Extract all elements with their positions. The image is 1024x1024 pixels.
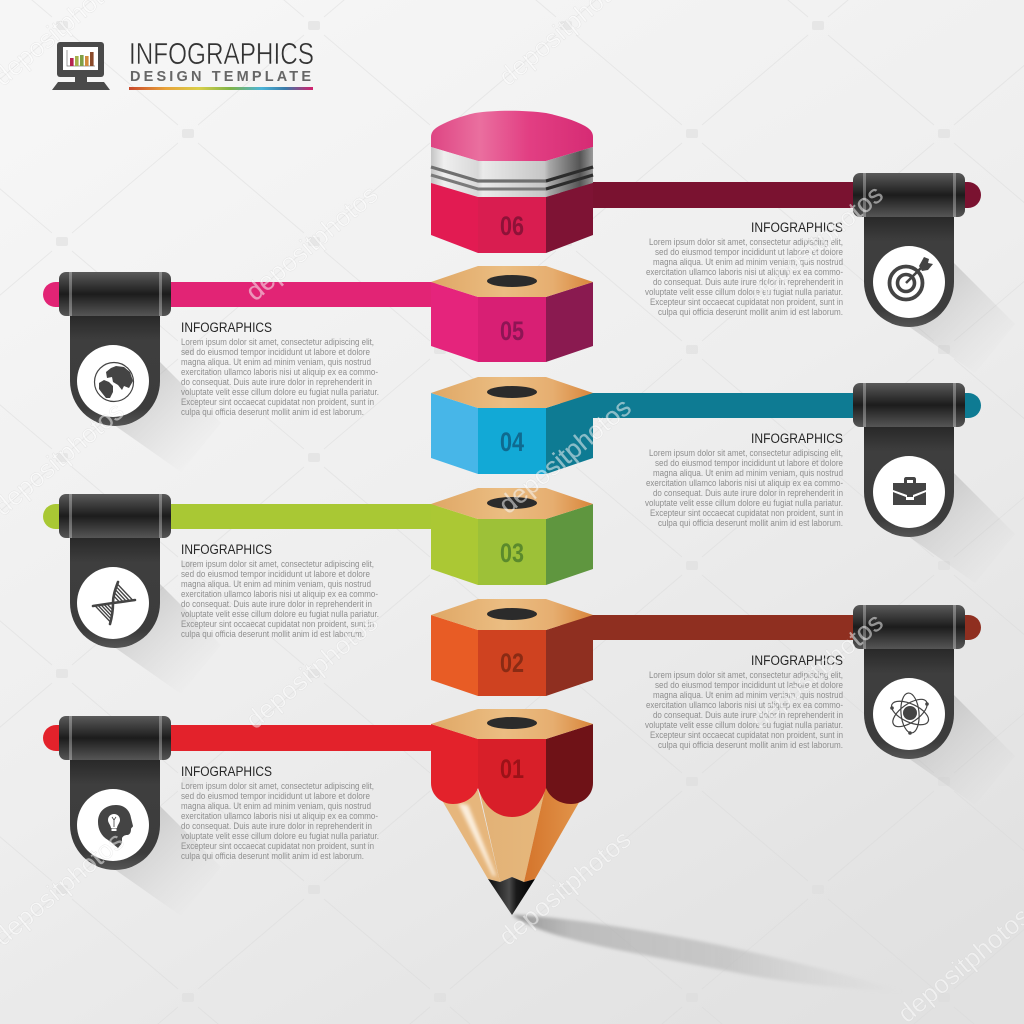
text block 06: magna aliqua. Ut enim ad minim veniam, quis nostrud	[653, 257, 843, 267]
text block 04	[645, 431, 843, 528]
number 02: 02	[500, 648, 524, 678]
text block 01: magna aliqua. Ut enim ad minim veniam, quis nostrud	[181, 801, 371, 811]
text block 02: Excepteur sint occaecat cupidatat non proident, sunt in	[650, 730, 843, 740]
text block 03: sed do eiusmod tempor incididunt ut labore et dolore	[181, 569, 370, 579]
text block 05: Excepteur sint occaecat cupidatat non proident, sunt in	[181, 397, 374, 407]
text block 03: voluptate velit esse cillum dolore eu fugiat nulla pariatur.	[181, 609, 379, 619]
text block 02: sed do eiusmod tempor incididunt ut labore et dolore	[655, 680, 843, 690]
text block 04: Excepteur sint occaecat cupidatat non proident, sunt in	[650, 508, 843, 518]
text block 06	[645, 220, 843, 317]
header title: DESIGN TEMPLATE	[130, 69, 311, 85]
text block 05: do consequat. Duis aute irure dolor in reprehenderit in	[181, 377, 372, 387]
text block 04: INFOGRAPHICS	[751, 431, 843, 446]
text block 02: culpa qui officia deserunt mollit anim id est laborum.	[658, 740, 843, 750]
text block 02: exercitation ullamco laboris nisi ut aliquip ex ea commo-	[646, 700, 843, 710]
text block 05: Lorem ipsum dolor sit amet, consectetur adipiscing elit,	[181, 337, 374, 347]
ribbon 03 with DNA icon	[59, 494, 221, 694]
text block 06: Lorem ipsum dolor sit amet, consectetur adipiscing elit,	[649, 237, 843, 247]
pencil segment 03	[431, 488, 593, 585]
text block 01: sed do eiusmod tempor incididunt ut labore et dolore	[181, 791, 370, 801]
text block 01: do consequat. Duis aute irure dolor in reprehenderit in	[181, 821, 372, 831]
header logo: monitor icon	[52, 42, 110, 90]
text block 03	[181, 542, 379, 639]
watermarks: depositphotos	[493, 824, 637, 952]
icon: head with light bulb	[98, 805, 133, 848]
pencil eraser segment 06	[431, 111, 593, 253]
watermarks: depositphotos	[745, 179, 889, 307]
text block 05: voluptate velit esse cillum dolore eu fugiat nulla pariatur.	[181, 387, 379, 397]
pencil segment 02	[431, 599, 593, 696]
text block 01	[181, 764, 379, 861]
text block 06: exercitation ullamco laboris nisi ut aliquip ex ea commo-	[646, 267, 843, 277]
text block 02	[645, 653, 843, 750]
text block 04: culpa qui officia deserunt mollit anim id est laborum.	[658, 518, 843, 528]
icon: DNA helix	[93, 582, 135, 624]
text block 06: do consequat. Duis aute irure dolor in reprehenderit in	[653, 277, 843, 287]
text block 03: culpa qui officia deserunt mollit anim id est laborum.	[181, 629, 364, 639]
text block 06: Excepteur sint occaecat cupidatat non proident, sunt in	[650, 297, 843, 307]
graphite lead	[488, 877, 535, 915]
text block 04: exercitation ullamco laboris nisi ut aliquip ex ea commo-	[646, 478, 843, 488]
ribbon 05 with globe icon	[59, 272, 221, 472]
text block 05: culpa qui officia deserunt mollit anim id est laborum.	[181, 407, 364, 417]
text block 05: sed do eiusmod tempor incididunt ut labore et dolore	[181, 347, 370, 357]
text block 03: do consequat. Duis aute irure dolor in reprehenderit in	[181, 599, 372, 609]
text block 04: magna aliqua. Ut enim ad minim veniam, quis nostrud	[653, 468, 843, 478]
watermarks: depositphotos	[240, 179, 384, 307]
pencil tip segment 01	[431, 709, 593, 915]
icon: briefcase	[893, 477, 926, 505]
text block 02: do consequat. Duis aute irure dolor in reprehenderit in	[653, 710, 843, 720]
text block 01: exercitation ullamco laboris nisi ut aliquip ex ea commo-	[181, 811, 378, 821]
icon: globe	[94, 362, 134, 402]
text block 06: voluptate velit esse cillum dolore eu fugiat nulla pariatur.	[645, 287, 843, 297]
text block 01: voluptate velit esse cillum dolore eu fugiat nulla pariatur.	[181, 831, 379, 841]
number 03: 03	[500, 538, 524, 568]
text block 03: magna aliqua. Ut enim ad minim veniam, quis nostrud	[181, 579, 371, 589]
pencil segment 04	[431, 377, 593, 474]
text block 03: Excepteur sint occaecat cupidatat non proident, sunt in	[181, 619, 374, 629]
text block 02: voluptate velit esse cillum dolore eu fugiat nulla pariatur.	[645, 720, 843, 730]
number 01: 01	[500, 754, 524, 784]
wood cone	[436, 785, 589, 882]
number 06: 06	[500, 211, 524, 241]
watermarks: depositphotos	[493, 392, 637, 520]
number 04: 04	[500, 427, 524, 457]
ribbon 04 with briefcase icon	[853, 383, 1015, 583]
eraser top	[431, 111, 593, 161]
text block 03: INFOGRAPHICS	[181, 542, 272, 557]
text block 04: voluptate velit esse cillum dolore eu fugiat nulla pariatur.	[645, 498, 843, 508]
number 05: 05	[500, 316, 524, 346]
icon: atom	[888, 692, 932, 735]
header title	[129, 36, 314, 90]
text block 01: Lorem ipsum dolor sit amet, consectetur adipiscing elit,	[181, 781, 374, 791]
header title: INFOGRAPHICS	[129, 36, 314, 71]
segment 06 faces	[431, 183, 593, 253]
text block 06: INFOGRAPHICS	[751, 220, 843, 235]
ribbon 01 with head icon	[59, 716, 221, 916]
text block 06: culpa qui officia deserunt mollit anim id est laborum.	[658, 307, 843, 317]
pencil segment 05	[431, 266, 593, 362]
watermarks: depositphotos	[240, 607, 384, 735]
text block 05: magna aliqua. Ut enim ad minim veniam, quis nostrud	[181, 357, 371, 367]
text block 02: INFOGRAPHICS	[751, 653, 843, 668]
watermarks: depositphotos	[745, 607, 889, 735]
ribbon 02 with atom icon	[853, 605, 1015, 805]
text block 02: Lorem ipsum dolor sit amet, consectetur adipiscing elit,	[649, 670, 843, 680]
text block 06: sed do eiusmod tempor incididunt ut labore et dolore	[655, 247, 843, 257]
text block 05: exercitation ullamco laboris nisi ut aliquip ex ea commo-	[181, 367, 378, 377]
metal ferrule	[431, 147, 593, 197]
pencil shadow	[512, 915, 905, 992]
text block 05: INFOGRAPHICS	[181, 320, 272, 335]
text block 01: culpa qui officia deserunt mollit anim id est laborum.	[181, 851, 364, 861]
text block 04: sed do eiusmod tempor incididunt ut labore et dolore	[655, 458, 843, 468]
ribbon 06 with target icon	[853, 173, 1015, 373]
text block 01: INFOGRAPHICS	[181, 764, 272, 779]
connector bands	[43, 182, 981, 751]
text block 03: Lorem ipsum dolor sit amet, consectetur adipiscing elit,	[181, 559, 374, 569]
text block 02: magna aliqua. Ut enim ad minim veniam, quis nostrud	[653, 690, 843, 700]
text block 01: Excepteur sint occaecat cupidatat non proident, sunt in	[181, 841, 374, 851]
red scalloped faces	[431, 724, 593, 817]
text block 04: Lorem ipsum dolor sit amet, consectetur adipiscing elit,	[649, 448, 843, 458]
text block 03: exercitation ullamco laboris nisi ut aliquip ex ea commo-	[181, 589, 378, 599]
text block 04: do consequat. Duis aute irure dolor in reprehenderit in	[653, 488, 843, 498]
text block 05	[181, 320, 379, 417]
icon: target	[890, 257, 933, 300]
